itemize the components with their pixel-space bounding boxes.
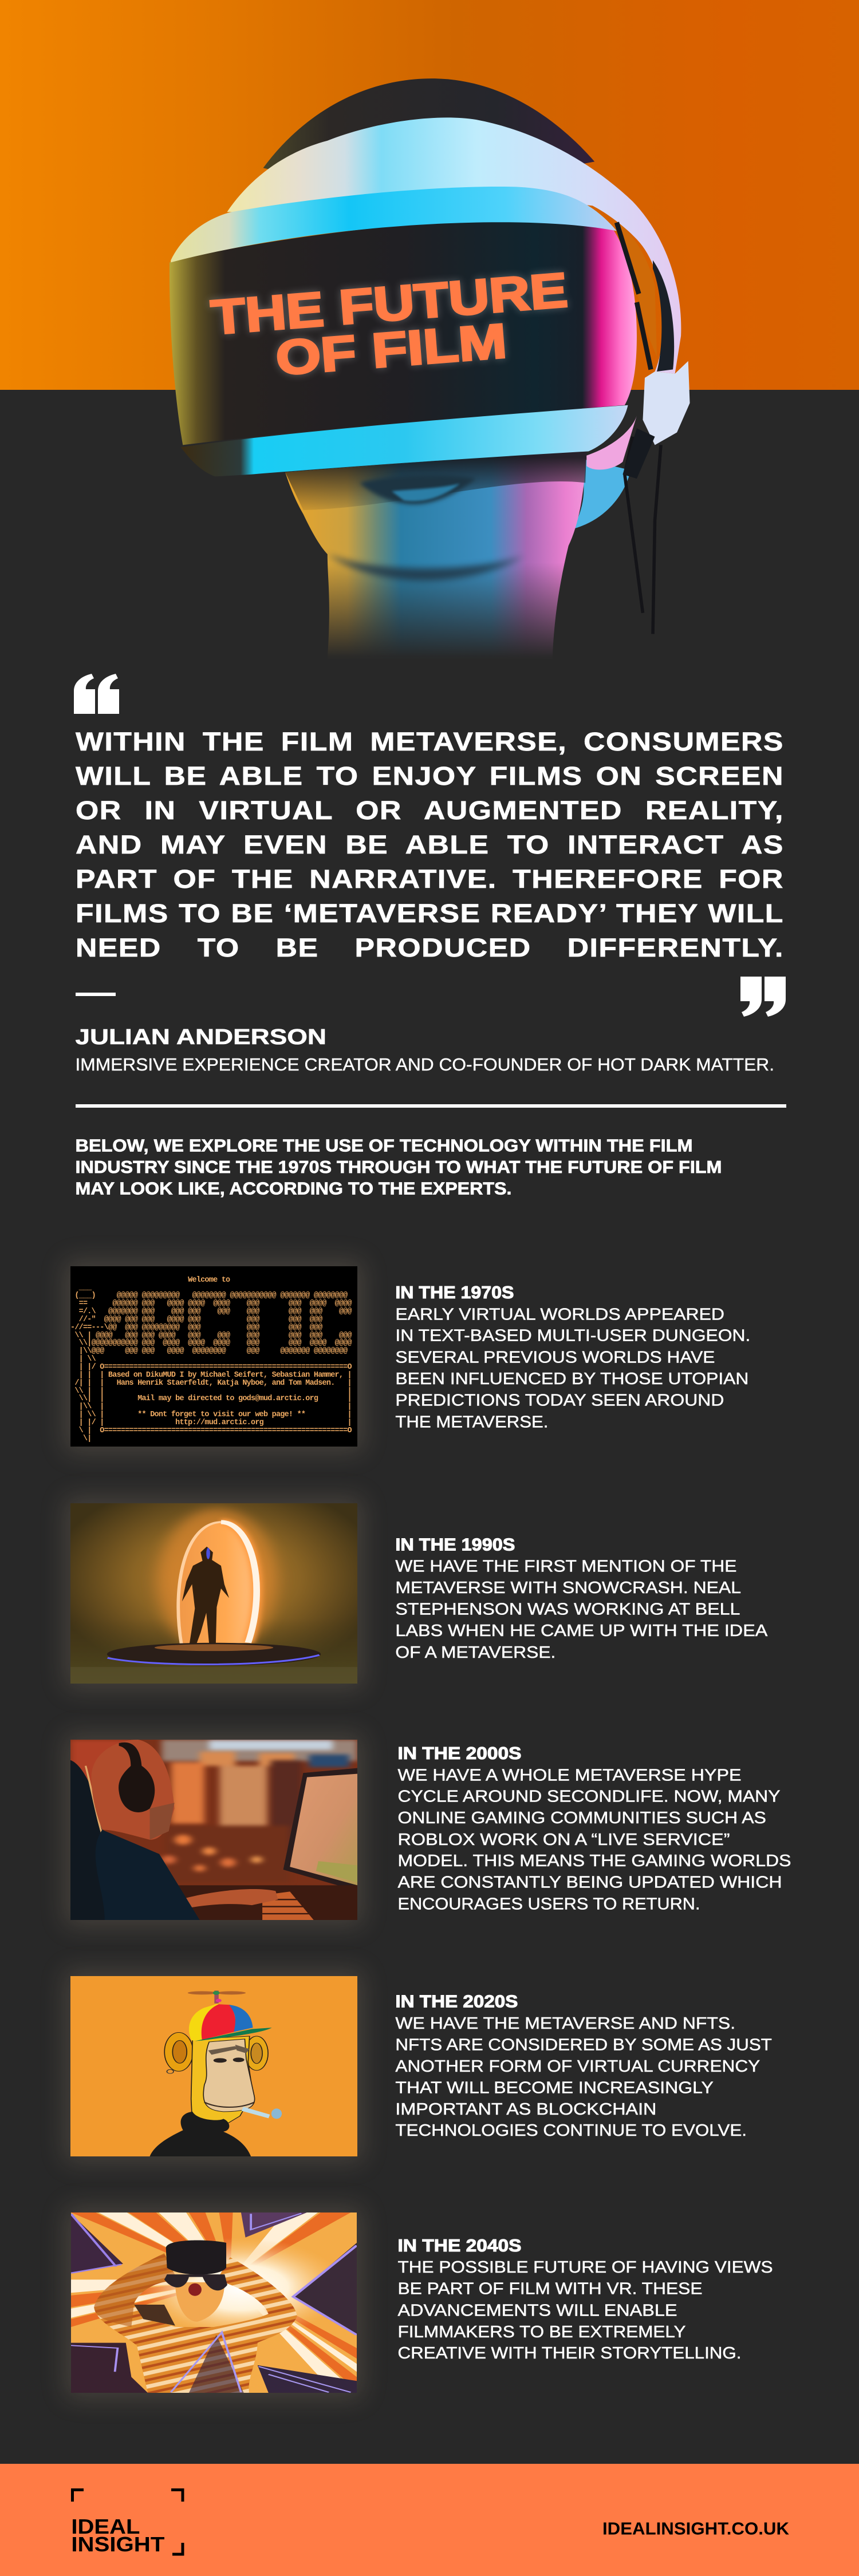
text: 2040s: FILMMAKERS TO BE EXTREMELY	[397, 2323, 686, 2341]
text: 1970s: IN THE 1970S	[395, 1283, 514, 1302]
text: 2040s: BE PART OF FILM WITH VR. THESE	[397, 2280, 702, 2298]
intro text: BELOW, WE EXPLORE THE USE OF TECHNOLOGY WITHIN THE FILM	[76, 1136, 693, 1156]
quote text: NEED TO BE PRODUCED DIFFERENTLY.	[76, 933, 783, 962]
text: 2020s: IMPORTANT AS BLOCKCHAIN	[395, 2100, 656, 2119]
logo: Ideal Insight: INSIGHT	[71, 2532, 164, 2556]
title	[209, 263, 570, 386]
text: 1990s: METAVERSE WITH SNOWCRASH. NEAL	[395, 1579, 741, 1597]
text: 2000s: IN THE 2000S	[397, 1744, 521, 1763]
footer band	[0, 2464, 859, 2576]
text: 1970s: EARLY VIRTUAL WORLDS APPEARED	[395, 1305, 724, 1323]
timeline item: 2040s	[58, 2199, 773, 2405]
text: 2040s: ADVANCEMENTS WILL ENABLE	[397, 2301, 677, 2320]
image: gamer at monitors	[70, 1740, 357, 1920]
text: 1970s: PREDICTIONS TODAY SEEN AROUND	[395, 1392, 724, 1410]
intro text: MAY LOOK LIKE, ACCORDING TO THE EXPERTS.	[76, 1179, 512, 1199]
text: 2040s: THE POSSIBLE FUTURE OF HAVING VIEWS	[397, 2258, 773, 2277]
icon: closing quote mark	[740, 977, 786, 1017]
text: 2020s: ANOTHER FORM OF VIRTUAL CURRENCY	[395, 2057, 760, 2076]
text: 1970s: SEVERAL PREVIOUS WORLDS HAVE	[395, 1349, 715, 1367]
logo: Ideal Insight	[71, 2488, 184, 2556]
text: 2040s: CREATIVE WITH THEIR STORYTELLING.	[397, 2344, 741, 2362]
image: person in VR with light burst	[71, 2212, 357, 2393]
quote text	[76, 727, 783, 962]
text: 2040s: IN THE 2040S	[397, 2236, 521, 2255]
quote text: AND MAY EVEN BE ABLE TO INTERACT AS	[76, 830, 783, 859]
headset illustration	[170, 78, 690, 658]
text: 1990s: IN THE 1990S	[395, 1535, 515, 1554]
text: 1970s: THE METAVERSE.	[395, 1413, 548, 1431]
timeline item: 1990s	[57, 1491, 768, 1697]
text: 2020s: WE HAVE THE METAVERSE AND NFTS.	[395, 2014, 735, 2033]
text: 2020s: IN THE 2020S	[395, 1992, 518, 2011]
text: 2000s: ENCOURAGES USERS TO RETURN.	[397, 1895, 700, 1913]
hero: orange band with VR headset head	[0, 0, 859, 658]
text: 2000s: WE HAVE A WHOLE METAVERSE HYPE	[397, 1766, 741, 1784]
image: NFT ape with propeller cap	[70, 1976, 357, 2156]
text: 2020s	[395, 1992, 772, 2140]
text: 1970s: BEEN INFLUENCED BY THOSE UTOPIAN	[395, 1370, 748, 1388]
text: 1970s	[395, 1283, 750, 1431]
quote text: WILL BE ABLE TO ENJOY FILMS ON SCREEN	[76, 761, 783, 791]
text: 2000s: ARE CONSTANTLY BEING UPDATED WHICH	[397, 1873, 782, 1891]
timeline item: 1970s	[57, 1254, 750, 1460]
image: arctic MUD terminal screen: Welcome to ___ (___) @@@@@ @@@@@@@@@ @@@@@@@@ @@@@@@@@@@@ @@@@@@@ @@@@@@@@ == @@@@@@ @@@ @@@@ @@@@ @@@@ @@@ @@@ @@@@ @@@@ =/.\ @@@@@@@ @@@ @@@ @@@ @@@ @@@ @@@ @@@ @@@ //-" @@@@ @@@ @@@ @@@@ @@@ @@@ @@@ @@@ -//==---\@@ @@@ @@@@@@@@@ @@@ @@@ @@@ @@@ \\ | @@@@ @@@ @@@ @@@@ @@@ @@@ @@@ @@@ @@@ @@@ \\|@@@@@@@@@@@ @@@ @@@@ @@@@ @@@@ @@@ @@@ @@@@ @@@@ |\\@@@ @@@ @@@ @@@@ @@@@@@@@ @@@ @@@@@@@ @@@@@@@@ | \\ | |/ O==========================================================O | | | Based on DikuMUD I by Michael Seifert, Sebastian Hammer, | /| | | Hans Henrik Staerfeldt, Katja Nyboe, and Tom Madsen. | \\ | | | \\| | Mail may be directed to gods@mud.arctic.org | |\\ | | | \\ | ** Dont forget to visit our web page! ** | | |/ | http://mud.arctic.org | \ | O==========================================================O \|	[70, 1275, 352, 1443]
intro text: INDUSTRY SINCE THE 1970S THROUGH TO WHAT THE FUTURE OF FILM	[76, 1157, 722, 1177]
text: 1990s: LABS WHEN HE CAME UP WITH THE IDEA	[395, 1622, 768, 1640]
quote text: PART OF THE NARRATIVE. THEREFORE FOR	[76, 864, 783, 894]
logo: Ideal Insight: IDEAL	[71, 2515, 140, 2538]
icon: opening quote mark	[74, 674, 119, 714]
text: 2000s: CYCLE AROUND SECONDLIFE. NOW, MANY	[397, 1788, 780, 1806]
quote text: WITHIN THE FILM METAVERSE, CONSUMERS	[76, 727, 783, 756]
quote text: OR IN VIRTUAL OR AUGMENTED REALITY,	[76, 796, 783, 825]
text: 2000s: ONLINE GAMING COMMUNITIES SUCH AS	[397, 1809, 766, 1827]
text: 1990s: OF A METAVERSE.	[395, 1643, 555, 1662]
text: 2000s	[397, 1744, 791, 1913]
intro text	[76, 1136, 722, 1199]
text: 1970s: IN TEXT-BASED MULTI-USER DUNGEON.	[395, 1327, 750, 1345]
attribution	[76, 1025, 774, 1074]
text: 2000s: ROBLOX WORK ON A “LIVE SERVICE”	[397, 1831, 730, 1849]
timeline item: 2000s	[57, 1726, 791, 1933]
timeline item: 2020s	[57, 1963, 772, 2170]
text: 1990s: WE HAVE THE FIRST MENTION OF THE	[395, 1558, 736, 1576]
text: 2040s	[397, 2236, 773, 2362]
title: THE FUTURE	[209, 263, 570, 345]
text: 1990s	[395, 1535, 768, 1662]
title: OF FILM	[274, 314, 509, 386]
quote text: FILMS TO BE ‘METAVERSE READY’ THEY WILL	[76, 899, 783, 928]
text: 2020s: NFTS ARE CONSIDERED BY SOME AS JUST	[395, 2036, 772, 2054]
text: 2020s: THAT WILL BECOME INCREASINGLY	[395, 2079, 714, 2097]
attribution: IMMERSIVE EXPERIENCE CREATOR AND CO-FOUNDER OF HOT DARK MATTER.	[76, 1054, 774, 1074]
attribution dash	[76, 993, 116, 996]
text: 2000s: MODEL. THIS MEANS THE GAMING WORLDS	[397, 1852, 791, 1870]
image: figure in glowing portal	[70, 1503, 357, 1684]
text: 2020s: TECHNOLOGIES CONTINUE TO EVOLVE.	[395, 2121, 747, 2140]
attribution: JULIAN ANDERSON	[76, 1025, 326, 1049]
text: 1990s: STEPHENSON WAS WORKING AT BELL	[395, 1601, 740, 1619]
website url: IDEALINSIGHT.CO.UK	[602, 2519, 790, 2538]
